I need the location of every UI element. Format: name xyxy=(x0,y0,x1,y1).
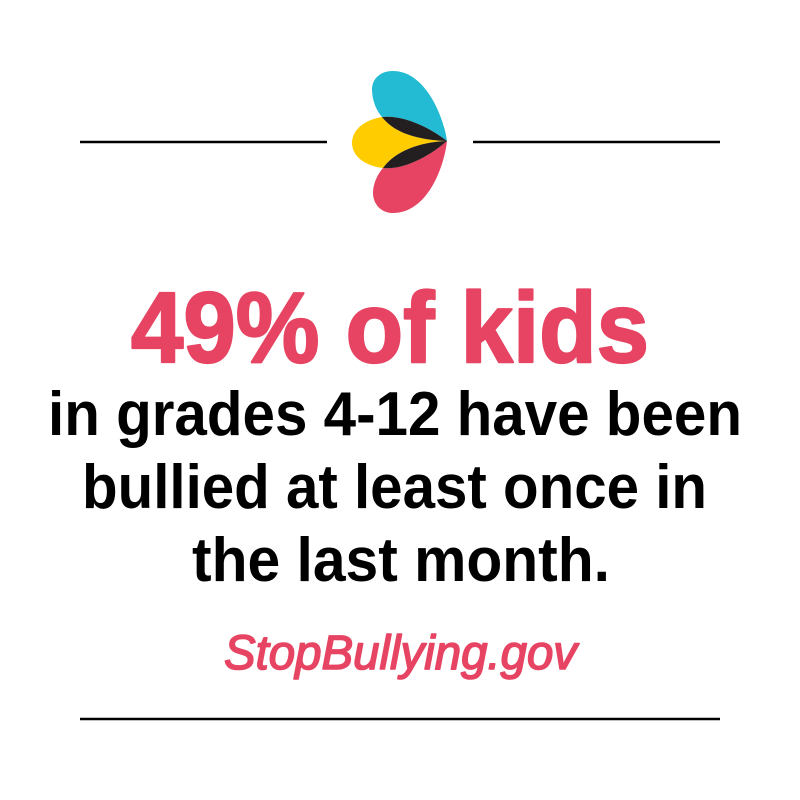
source: StopBullying.gov: StopBullying.gov xyxy=(224,627,580,680)
body text: bullied at least once in xyxy=(82,453,707,522)
body text: in grades 4-12 have been xyxy=(48,380,742,449)
headline: 49% of kids: 49% of kids xyxy=(131,272,649,384)
body text xyxy=(48,380,742,595)
body text: the last month. xyxy=(192,526,610,595)
icon: petal logo xyxy=(352,71,447,213)
